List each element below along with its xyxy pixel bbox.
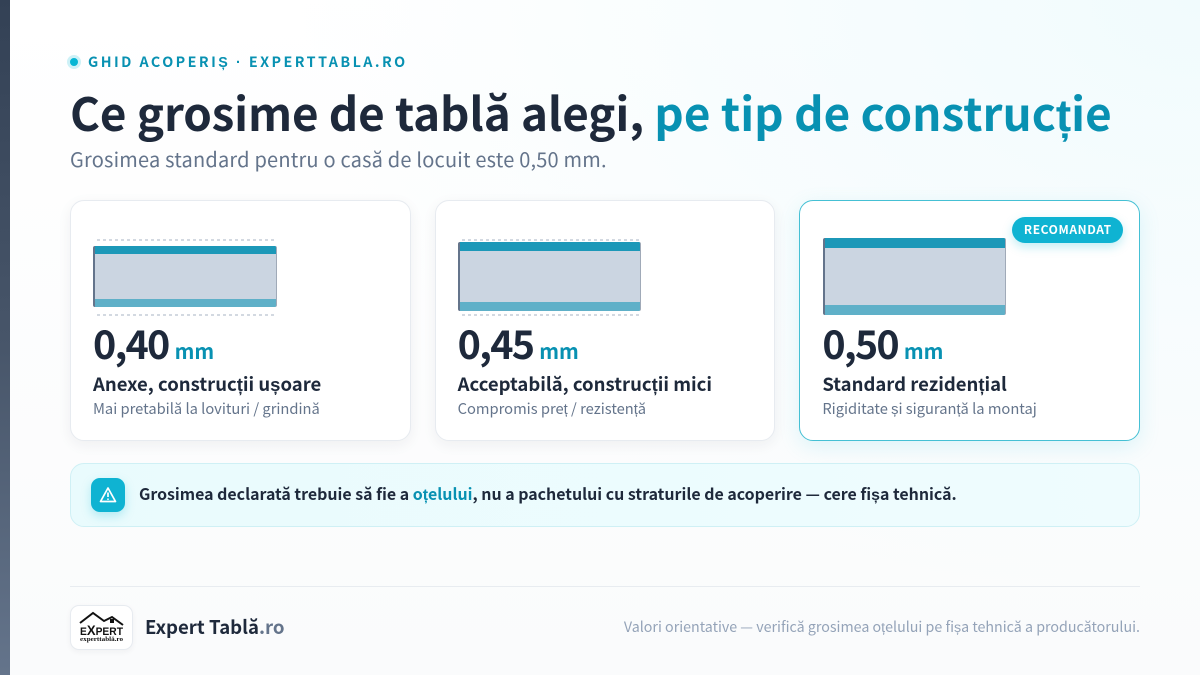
title: Ce grosime de tablă alegi, pe tip de construcție [70,79,1112,145]
eyebrow text: GHID ACOPERIȘ · EXPERTTABLA.RO [88,51,408,72]
thickness value: 0,50 mm [822,314,943,371]
eyebrow label [67,51,408,72]
panel: 0,40 mm [70,200,411,440]
footer disclaimer: Valori orientative — verifică grosimea oțelului pe fișa tehnică a producătorului. [624,616,1140,637]
subtitle: Grosimea standard pentru o casă de locuit este 0,50 mm. [70,144,607,173]
card note: Rigiditate și siguranță la montaj [822,398,1037,419]
icon: pulse dot [67,55,81,69]
card note: Compromis preț / rezistență [458,398,646,419]
thickness value: 0,40 mm [93,314,214,371]
card note: Mai pretabilă la lovituri / grindină [93,398,320,419]
brand name: Expert Tablă.ro [145,613,285,640]
panel: 0,45 mm [435,200,775,440]
callout: steel thickness warning [70,463,1140,527]
panel: 0,50 mm recommended [799,200,1140,440]
left accent strip [0,0,10,675]
thickness diagram 0,45 [458,239,641,316]
footer divider [70,586,1140,587]
thickness diagram 0,40 [93,239,277,316]
card heading: Anexe, construcții ușoare [93,371,321,397]
thickness diagram 0,50 [823,238,1006,315]
card heading: Standard rezidențial [822,371,1007,397]
recommended badge [1012,216,1123,242]
logo mark: EXPERT [80,622,123,638]
recommended badge: RECOMANDAT [1024,220,1112,238]
icon: warning [91,478,125,512]
card heading: Acceptabilă, construcții mici [458,371,712,397]
callout text: Grosimea declarată trebuie să fie a oțelului, nu a pachetului cu straturile de acoperire — cere fișa tehnică. [139,482,957,505]
logo tile [70,605,133,650]
logo mark: experttablă.ro [80,637,123,643]
logo mark [79,612,124,643]
thickness value: 0,45 mm [458,314,579,371]
